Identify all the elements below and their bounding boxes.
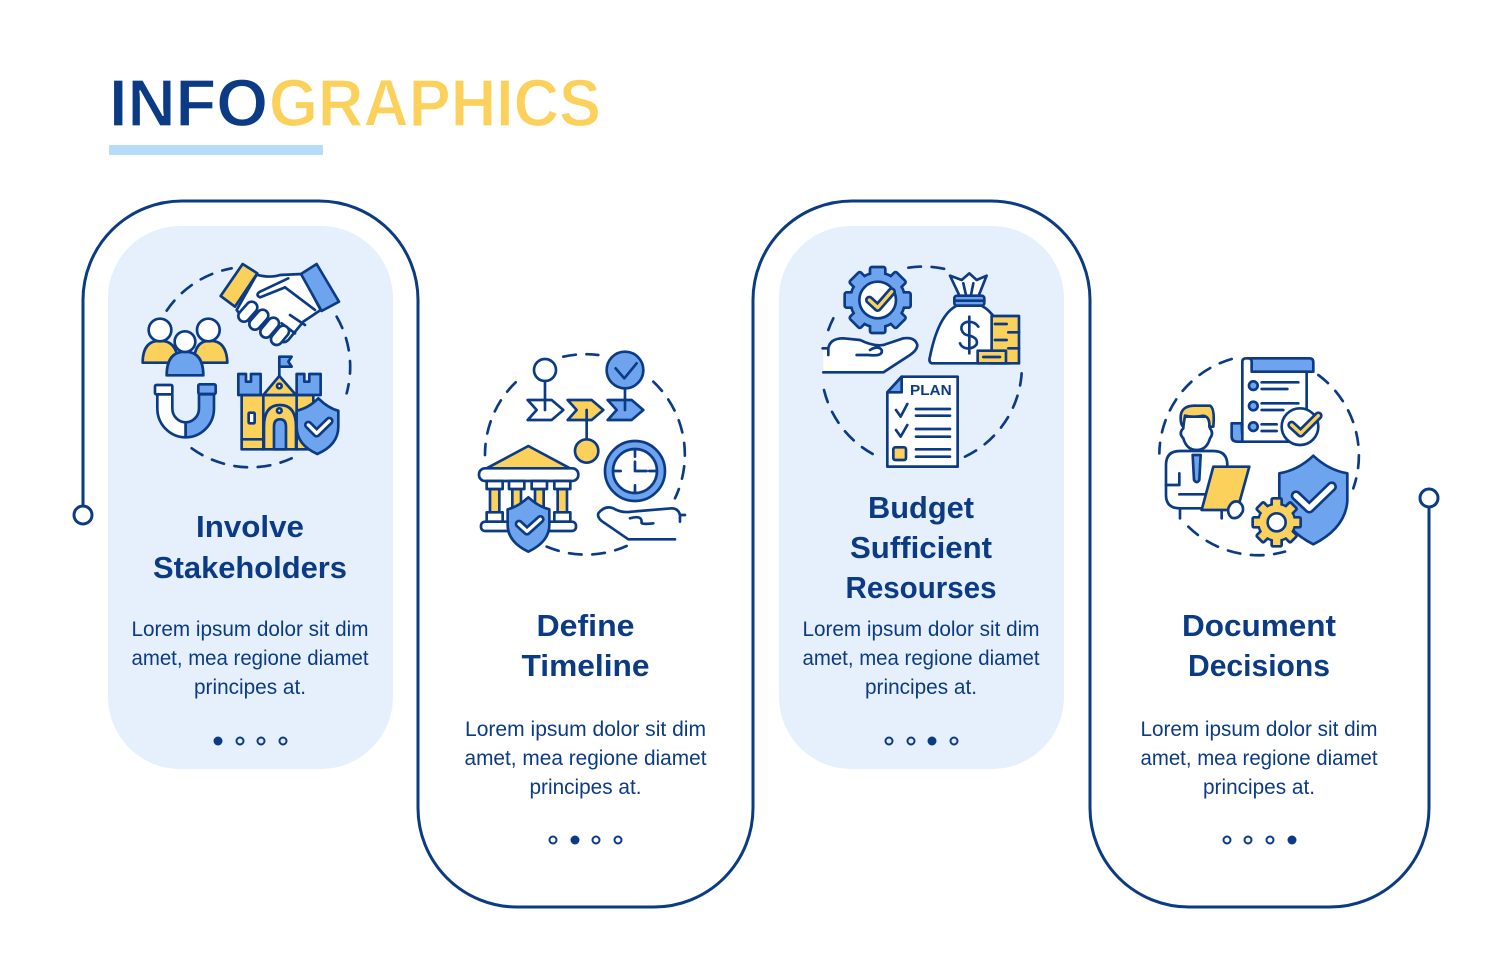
body text: principes at. <box>1203 776 1315 799</box>
heading <box>153 509 347 585</box>
body text <box>464 718 707 799</box>
icon: timeline <box>479 352 685 555</box>
body text: principes at. <box>530 776 642 799</box>
heading: Sufficient <box>850 530 992 565</box>
body text <box>132 618 369 699</box>
body text: principes at. <box>194 676 306 699</box>
title underline <box>109 145 323 155</box>
title: GRAPHICS <box>269 66 601 141</box>
panel: document decisions <box>1140 358 1378 844</box>
icon: document <box>1159 358 1359 555</box>
body text: Lorem ipsum dolor sit dim <box>802 618 1040 641</box>
page dots <box>550 836 622 844</box>
heading: Involve <box>196 509 304 544</box>
heading: Document <box>1182 608 1336 643</box>
body text: amet, mea regione diamet <box>464 747 707 770</box>
heading: Timeline <box>522 648 650 683</box>
heading <box>522 608 650 683</box>
heading <box>846 490 996 605</box>
icon: budget <box>823 267 1022 467</box>
page dots <box>1224 836 1296 844</box>
body text <box>1140 718 1378 799</box>
body text: Lorem ipsum dolor sit dim <box>465 718 706 741</box>
page dots <box>214 736 286 746</box>
body text: principes at. <box>865 676 977 699</box>
heading: Stakeholders <box>153 550 347 585</box>
body text: amet, mea regione diamet <box>132 647 369 670</box>
panel: define timeline <box>464 352 707 844</box>
heading: Resourses <box>846 570 996 605</box>
heading <box>1182 608 1336 683</box>
panel: involve stakeholders <box>108 226 393 769</box>
connecting outline <box>74 201 1438 907</box>
body text: amet, mea regione diamet <box>1140 747 1378 770</box>
body text: Lorem ipsum dolor sit dim <box>1140 718 1378 741</box>
heading: Define <box>536 608 634 643</box>
panel: budget sufficient resources <box>779 226 1064 769</box>
icon: budget: PLAN <box>910 383 952 399</box>
body text <box>802 618 1040 699</box>
page dots <box>886 736 958 746</box>
title <box>109 66 601 141</box>
body text: amet, mea regione diamet <box>802 647 1040 670</box>
heading: Budget <box>868 490 974 525</box>
heading: Decisions <box>1188 648 1330 683</box>
icon: stakeholders <box>143 264 350 467</box>
title: INFO <box>109 66 268 141</box>
body text: Lorem ipsum dolor sit dim <box>132 618 368 641</box>
